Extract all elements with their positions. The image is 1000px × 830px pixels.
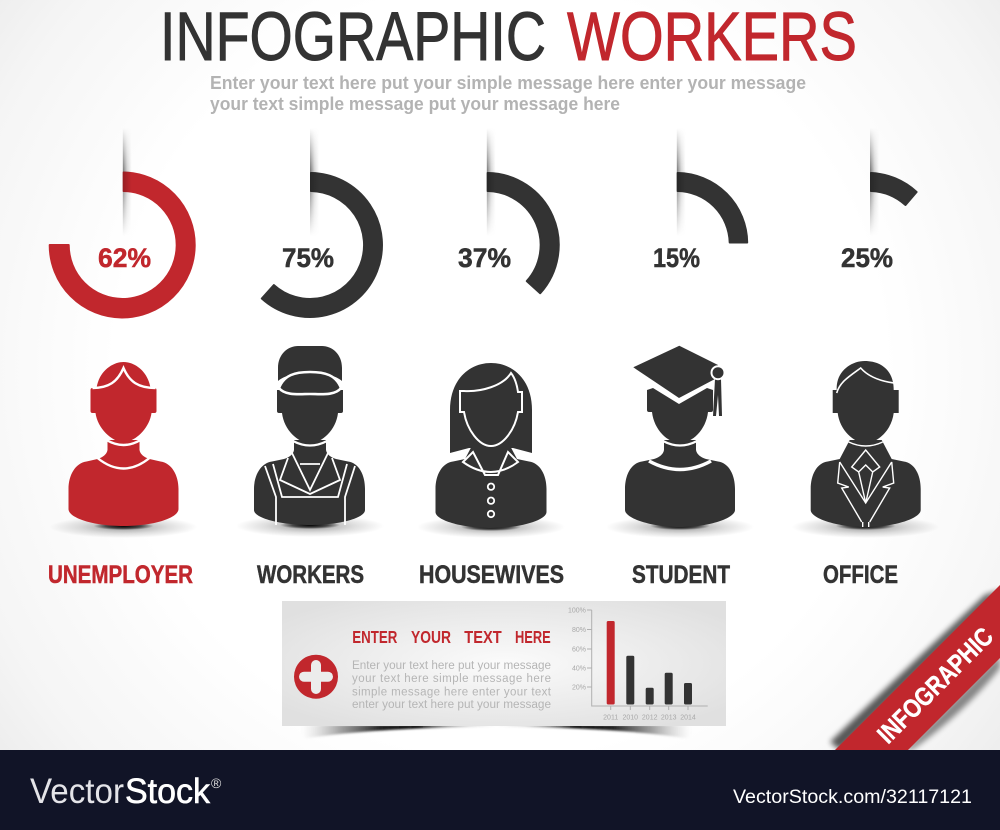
footer url: VectorStock.com/32117121 [733,787,972,808]
icon: unemployed person [50,362,198,538]
bar chart: 40% [572,666,586,672]
info panel [282,601,726,738]
category labels: HOUSEWIVES [419,561,564,589]
category labels [48,561,898,589]
ring chart: 37% [458,128,559,293]
panel text: enter your text here put your message [352,699,551,711]
VectorStock logo: Stock [125,772,210,811]
ring chart: 25% [841,128,917,273]
icon: student [606,346,754,538]
ring chart: 62% [50,128,195,317]
bar chart: 20% [572,684,586,692]
ring chart: 15% [653,128,747,273]
panel text: your text here simple message here [352,673,551,685]
VectorStock logo: ® [211,775,222,791]
panel heading: YOUR [411,627,451,647]
panel heading [352,627,551,647]
bar chart: 100% [568,608,586,614]
icon: housewife [417,363,565,538]
ring chart: 62%: 62% [98,243,151,273]
category labels: UNEMPLOYER [48,561,193,589]
subtitle: Enter your text here put your simple message here enter your message [210,73,806,93]
ring chart: 75% [262,128,382,317]
panel text: Enter your text here put your message [352,660,551,672]
VectorStock logo: Vector [30,772,124,811]
footer bar [0,750,1000,830]
bar chart: 2013 [661,714,677,722]
panel text [352,660,552,711]
title: WORKERS [567,0,857,75]
VectorStock logo [30,772,222,811]
panel text: simple message here enter your text [352,686,552,698]
category labels: OFFICE [823,561,898,589]
ring chart: 25%: 25% [841,243,893,273]
corner ribbon [830,585,1000,750]
subtitle [210,73,806,114]
icon: worker [236,346,384,537]
bar chart: 2012 [642,714,658,722]
panel heading: HERE [515,627,551,647]
bar chart: 80% [572,627,586,634]
title [160,0,857,75]
category labels: WORKERS [257,561,364,589]
bar chart [568,608,708,722]
ring chart: 75%: 75% [282,243,334,273]
ring chart: 15%: 15% [653,243,700,273]
panel heading: ENTER [352,627,398,647]
icon: plus circle [294,655,338,699]
icon: office worker [792,361,940,538]
category labels: STUDENT [632,561,730,589]
ring chart: 37%: 37% [458,243,511,273]
bar chart: 2014 [680,714,696,722]
panel heading: TEXT [464,627,502,647]
bar chart: 2010 [623,714,638,722]
title: INFOGRAPHIC [160,0,546,75]
bar chart: 2011 [603,714,618,722]
subtitle: your text simple message put your message here [210,94,620,114]
bar chart: 60% [572,646,586,654]
